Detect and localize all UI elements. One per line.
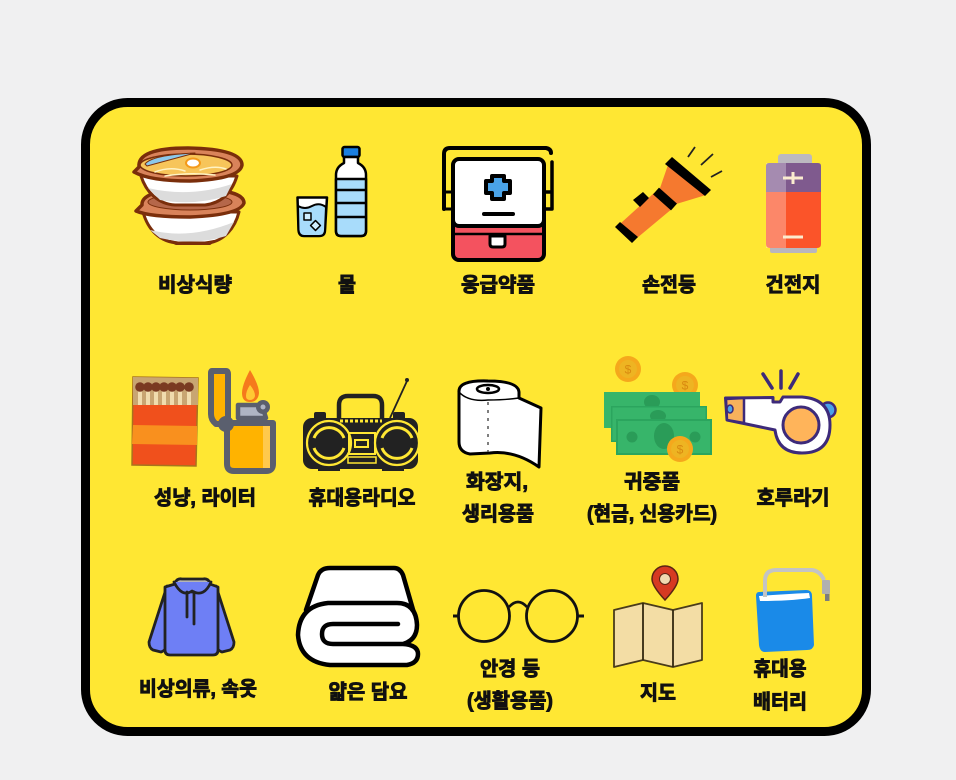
icon: folded blanket: [298, 568, 418, 665]
icon: round glasses: [453, 590, 584, 642]
label: first aid kit: 응급약품: [461, 274, 535, 297]
item: valuables: [587, 356, 717, 526]
label: valuables: 귀중품: [624, 471, 680, 494]
item: toilet paper and sanitary items: [459, 381, 541, 526]
icon: stacked instant noodle bowls: [134, 148, 244, 244]
item: thin blanket: [298, 568, 418, 704]
icon: matchbox: [132, 377, 198, 466]
label: toilet paper: 화장지,: [466, 471, 528, 494]
icon: cash and coins: $: [677, 443, 684, 457]
label: emergency clothing and underwear: 비상의류, 속옷: [139, 678, 257, 701]
icon: toilet paper roll: [459, 381, 541, 467]
icon: water bottle and glass: [298, 147, 366, 236]
icon: flashlight: [615, 147, 722, 243]
label: glasses etc.: 안경 등: [480, 658, 540, 681]
icon: hoodie: [149, 579, 234, 655]
label: water: 물: [338, 275, 356, 297]
item: map: [614, 566, 702, 705]
item: glasses: [453, 590, 584, 713]
label: map: 지도: [640, 682, 676, 705]
label: portable radio: 휴대용라디오: [308, 487, 416, 510]
label: dry cell battery: 건전지: [766, 274, 820, 297]
icon: cash and coins: [604, 356, 712, 462]
label: daily necessities: (생활용품): [467, 690, 553, 713]
panel: emergency supplies: [86, 102, 866, 732]
item: water: [298, 147, 366, 297]
item: flashlight: [615, 147, 722, 297]
label: thin blanket: 얇은 담요: [328, 681, 408, 704]
icon: cash and coins: $: [682, 379, 689, 393]
item: portable battery: [753, 570, 830, 714]
item: portable radio: [303, 378, 419, 510]
label: battery: 배터리: [753, 691, 807, 714]
icon: boombox radio: [303, 378, 419, 471]
item: emergency food: [134, 148, 244, 297]
label: sanitary items: 생리용품: [462, 503, 534, 526]
label: whistle: 호루라기: [756, 487, 830, 510]
item: dry cell battery: [766, 154, 821, 297]
label: flashlight: 손전등: [642, 274, 696, 297]
item: first aid kit: [444, 148, 552, 297]
label: matches and lighter: 성냥, 라이터: [154, 487, 256, 510]
icon: lighter: [211, 370, 273, 471]
label: cash and credit card: (현금, 신용카드): [587, 503, 717, 526]
label: portable: 휴대용: [754, 658, 806, 681]
icon: first aid kit: [444, 148, 552, 260]
icon: battery: [766, 154, 821, 253]
icon: whistle: [726, 371, 836, 453]
item: emergency clothing: [139, 579, 257, 701]
icon: power bank with cable: [756, 570, 830, 652]
icon: cash and coins: $: [625, 363, 632, 377]
label: emergency food: 비상식량: [158, 274, 232, 297]
icon: folded map with pin: [614, 566, 702, 667]
item: matches and lighter: [132, 370, 273, 510]
item: whistle: [726, 371, 836, 510]
